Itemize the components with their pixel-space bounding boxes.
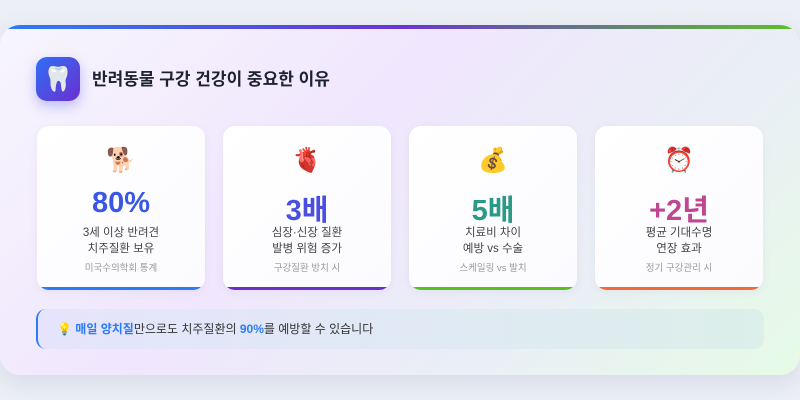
- card: 3배: 발병 위험 증가: [272, 243, 342, 255]
- card: 3배: [223, 126, 391, 290]
- card: 5배: [409, 126, 577, 290]
- card: 80%: 3세 이상 반려견: [83, 227, 159, 239]
- card: +2년: +2년: [649, 195, 709, 227]
- card: 5배: 5배: [472, 195, 514, 227]
- card: 80%: 치주질환 보유: [88, 243, 154, 255]
- card: 3배: 심장·신장 질환: [272, 227, 342, 239]
- card: 3배: 🫀: [292, 146, 322, 174]
- card: 80%: 미국수의학회 통계: [85, 263, 157, 274]
- card: +2년: [595, 126, 763, 290]
- card: 5배: 치료비 차이: [465, 227, 521, 239]
- card: 3배: 구강질환 방치 시: [274, 263, 340, 274]
- card: +2년: 평균 기대수명: [646, 227, 712, 239]
- card: 80%: 80%: [92, 187, 150, 219]
- card: +2년: ⏰: [664, 146, 694, 174]
- card: 80%: 🐕: [106, 146, 136, 174]
- card: 80%: [37, 126, 205, 290]
- title: 반려동물 구강 건강이 중요한 이유: [92, 70, 330, 89]
- callout: 💡 매일 양치질만으로도 치주질환의 90%를 예방할 수 있습니다: [57, 322, 373, 336]
- card: 5배: 💰: [478, 146, 508, 174]
- icon: tooth: [36, 57, 80, 101]
- card: +2년: 연장 효과: [656, 243, 702, 255]
- card: 3배: 3배: [286, 195, 328, 227]
- card: 5배: 스케일링 vs 발치: [459, 263, 527, 274]
- icon: tooth: 🦷: [43, 65, 73, 93]
- callout: [36, 309, 764, 349]
- card: 5배: 예방 vs 수술: [463, 243, 523, 255]
- card: +2년: 정기 구강관리 시: [646, 263, 712, 274]
